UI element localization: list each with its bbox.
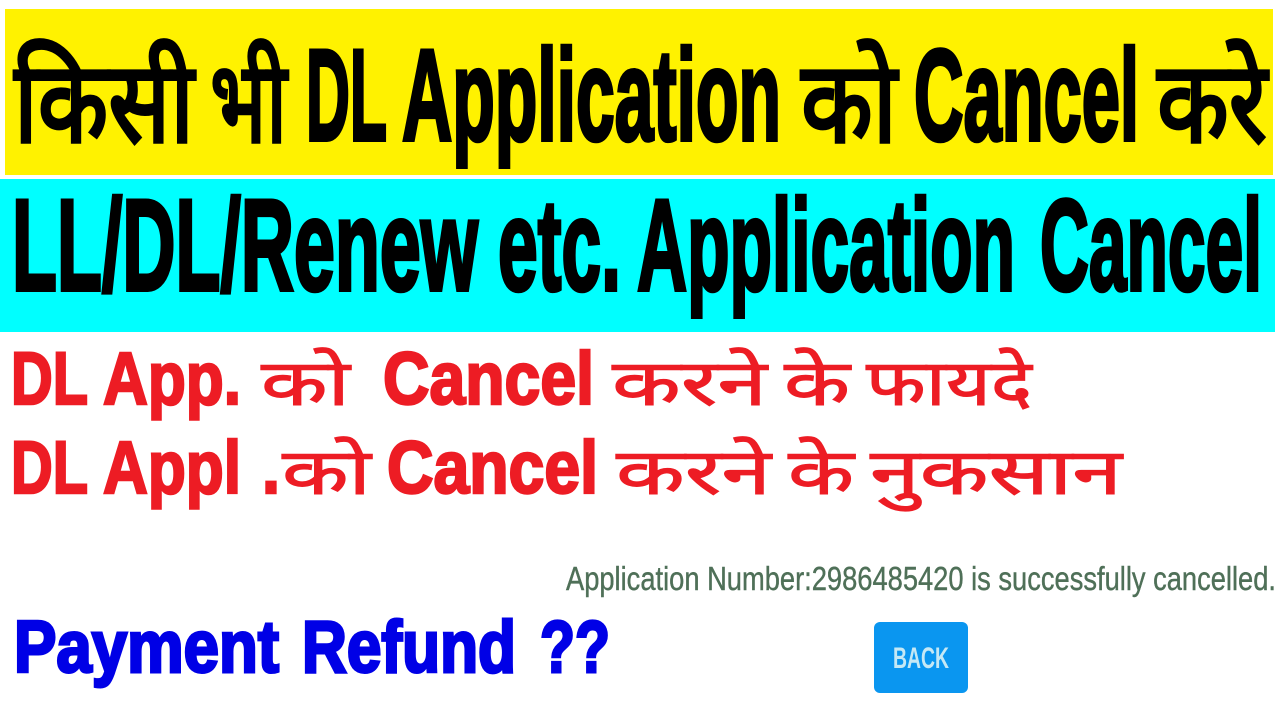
benefit line: Cancel — [383, 337, 594, 420]
benefit line: को — [261, 347, 352, 419]
drawback line: Appl — [103, 426, 241, 509]
drawback line: नुकसान — [870, 437, 1124, 512]
subtitle text: etc. — [498, 172, 621, 318]
title text: DL — [306, 22, 387, 168]
benefit line: फायदे — [866, 347, 1033, 419]
drawback line: करने — [616, 436, 773, 508]
title text — [12, 22, 1271, 168]
drawback line: DL — [11, 426, 88, 509]
benefit line: DL — [11, 337, 88, 420]
payment refund question: ?? — [540, 607, 610, 688]
subtitle text — [12, 172, 1262, 318]
benefit line: करने — [612, 347, 769, 419]
back button label: BACK — [893, 642, 949, 675]
banner: yellow title — [5, 9, 1273, 175]
drawback line: Cancel — [387, 426, 598, 509]
benefit line: App. — [103, 337, 241, 420]
payment refund question: Payment — [14, 607, 279, 688]
benefit line — [11, 337, 1033, 420]
drawback line — [11, 426, 1124, 512]
title text: Application — [402, 22, 781, 168]
back button — [874, 622, 968, 693]
payment refund question — [14, 607, 610, 688]
drawback line: . — [262, 426, 280, 509]
subtitle text: LL/DL/Renew — [12, 172, 478, 318]
banner: cyan subtitle — [0, 172, 1275, 332]
title text: भी — [210, 38, 289, 167]
benefit line: के — [784, 347, 852, 419]
payment refund question: Refund — [302, 607, 516, 688]
title text: को — [799, 38, 900, 167]
drawback line: को — [282, 436, 373, 508]
drawback line: के — [788, 436, 856, 508]
title text: किसी — [12, 38, 197, 167]
